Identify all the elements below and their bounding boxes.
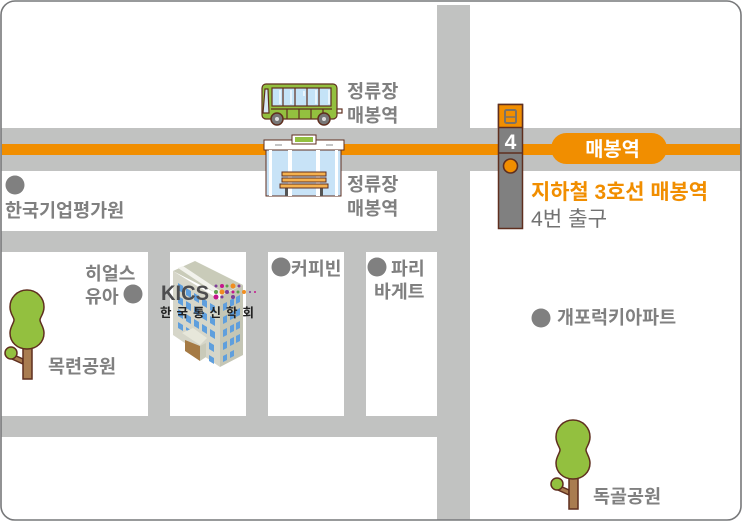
logo: KICS — [160, 282, 256, 320]
label: bus stop top: 정류장 — [347, 81, 398, 102]
label: exit number 4: 4 — [505, 131, 517, 154]
landmark: 한국기업평가원 — [5, 176, 124, 221]
landmark: 히얼스 유아: 히얼스 — [85, 263, 136, 284]
label: exit 4: 4번 출구 — [531, 207, 607, 231]
icon: tree 목련공원 — [5, 290, 44, 379]
landmark: 한국기업평가원: 한국기업평가원 — [5, 200, 124, 221]
icon: KICS building — [173, 261, 243, 367]
logo: KICS: KICS — [161, 282, 209, 305]
station pill: 매봉역: 매봉역 — [585, 139, 640, 161]
label: bus stop bottom: 정류장 — [347, 174, 398, 195]
logo: KICS: 한 국 통 신 학 회 — [160, 305, 254, 320]
label: bus stop bottom — [347, 174, 398, 219]
label: 독골공원: 독골공원 — [593, 486, 661, 507]
label: bus stop bottom: 매봉역 — [347, 198, 398, 219]
label: subway line 3: 지하철 3호선 매봉역 — [531, 181, 708, 204]
station pill: 매봉역 — [551, 133, 667, 164]
subway line 3 orange — [2, 144, 740, 155]
landmark: 개포럭키아파트: 개포럭키아파트 — [557, 307, 676, 328]
icon: subway exit sign — [498, 104, 522, 228]
icon: bus shelter — [264, 135, 344, 196]
landmark: 파리바게트: 파리 — [391, 258, 425, 279]
landmark: 커피빈: 커피빈 — [291, 258, 341, 279]
landmark: 파리바게트: 바게트 — [374, 281, 425, 302]
landmark: 히얼스 유아 — [85, 263, 142, 307]
landmark: 히얼스 유아: 유아 — [85, 286, 119, 307]
label: bus stop top — [347, 81, 398, 126]
landmark: 파리바게트 — [368, 258, 425, 302]
icon: bus — [262, 84, 342, 125]
label: 목련공원: 목련공원 — [48, 356, 116, 377]
icon: tree 독골공원 — [551, 420, 590, 509]
label: bus stop top: 매봉역 — [347, 105, 398, 126]
